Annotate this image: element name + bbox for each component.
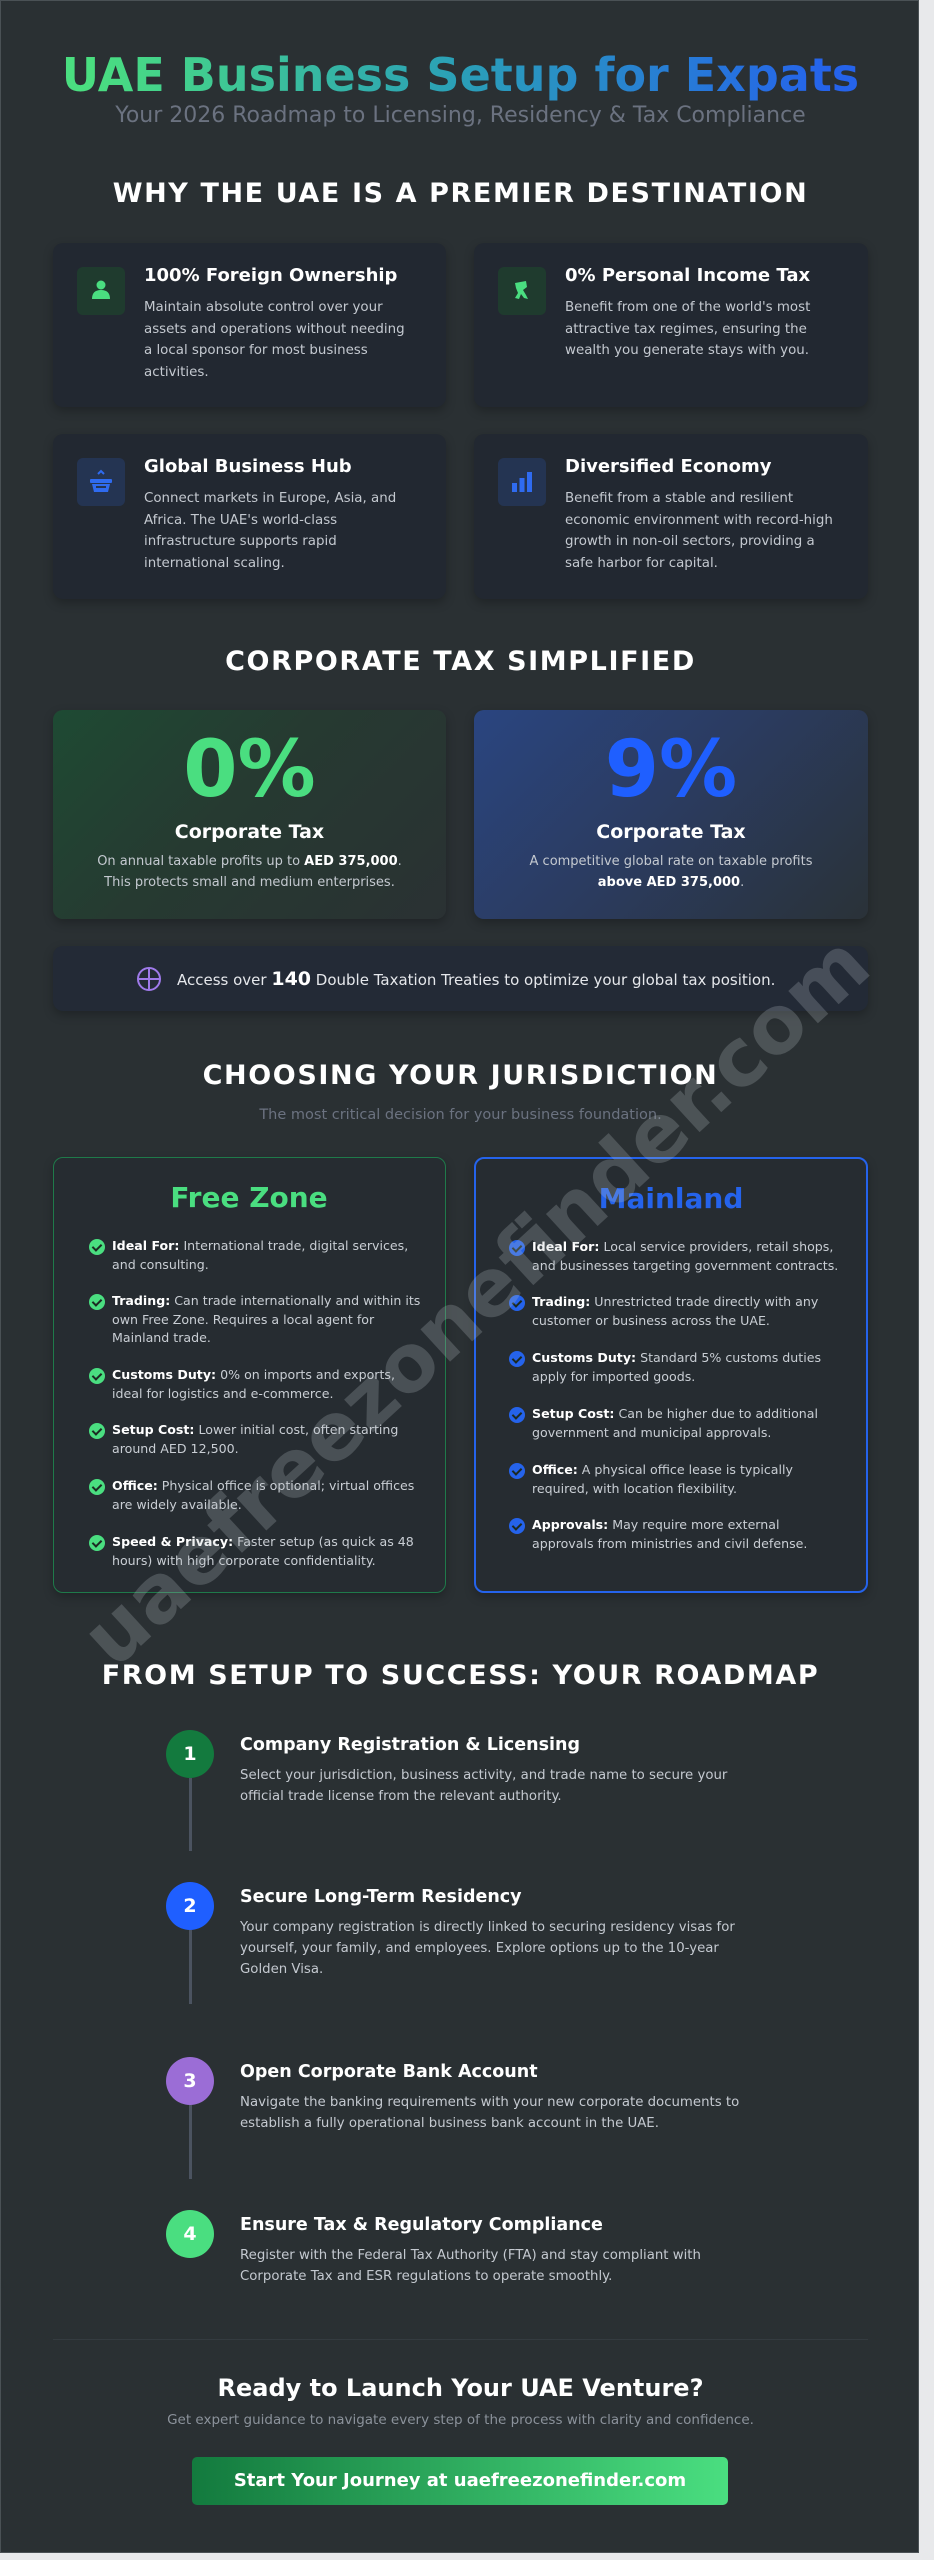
item: ideal for	[89, 1238, 408, 1272]
item: ideal for: and consulting.	[112, 1256, 209, 1272]
card: global hub	[53, 434, 446, 599]
item: setup cost	[509, 1406, 818, 1440]
item: setup cost: Setup Cost: Lower initial cost, often starting	[112, 1422, 398, 1437]
description: This protects small and medium enterprises.	[104, 875, 395, 890]
card: diversified economy	[474, 434, 868, 599]
watermark: uaefreezonefinder.com	[64, 917, 887, 1684]
item: setup cost	[89, 1422, 398, 1456]
heading: jurisdiction: CHOOSING YOUR JURISDICTION	[203, 1060, 718, 1091]
panel title: Free Zone	[170, 1181, 328, 1214]
item: ideal for: Ideal For: Local service providers, retail shops,	[532, 1239, 833, 1254]
icon: bar chart	[498, 458, 546, 506]
panel: 9% tax	[474, 710, 868, 919]
card: income tax	[474, 243, 868, 407]
icon: basket	[77, 458, 125, 506]
item: speed	[89, 1534, 414, 1568]
item: trading	[509, 1294, 818, 1328]
item: customs	[89, 1367, 395, 1400]
item: office	[509, 1462, 793, 1496]
step 4	[166, 2210, 701, 2284]
item: approvals: approvals from ministries and civil defense.	[532, 1536, 807, 1550]
description	[97, 854, 402, 890]
item: setup cost: Setup Cost: Can be higher due to additional	[532, 1406, 818, 1421]
step 4: Register with the Federal Tax Authority (FTA) and stay compliant with Corporate Tax and ESR regulations to operate smoothly.	[240, 2248, 701, 2284]
card title: Global Business Hub	[144, 456, 352, 477]
panel: 0% tax	[53, 710, 446, 919]
subheading: The most critical decision for your business foundation.	[259, 1107, 662, 1123]
step 2	[166, 1882, 735, 2004]
step 3: Navigate the banking requirements with your new corporate documents to establish a fully operational business bank account in the UAE.	[240, 2095, 739, 2131]
CTA heading: Ready to Launch Your UAE Venture?	[217, 2374, 704, 2402]
item: office: Office: A physical office lease is typically	[532, 1462, 793, 1477]
item: speed: Speed & Privacy: Faster setup (as quick as 48	[112, 1534, 414, 1549]
card title: Diversified Economy	[565, 456, 772, 477]
big number 9%: 9%	[605, 725, 737, 815]
description: above AED 375,000.	[598, 875, 744, 890]
step 4: Ensure Tax & Regulatory Compliance	[240, 2215, 603, 2235]
subtitle: Your 2026 Roadmap to Licensing, Residency & Tax Compliance	[115, 103, 806, 128]
step 3: Open Corporate Bank Account	[240, 2062, 538, 2082]
panel title: Mainland	[599, 1182, 743, 1215]
CTA button: Start Your Journey at uaefreezonefinder.com	[234, 2470, 686, 2491]
label: Corporate Tax	[596, 821, 746, 843]
card text: Maintain absolute control over your assets and operations without needing a local sponsor for most business activities.	[144, 300, 405, 380]
description: A competitive global rate on taxable profits	[530, 854, 812, 869]
description: On annual taxable profits up to AED 375,000.	[97, 854, 402, 869]
item: office: are widely available.	[112, 1496, 242, 1512]
item: ideal for: Ideal For: International trade, digital services,	[112, 1238, 408, 1253]
item: trading: own Free Zone. Requires a local agent for	[112, 1312, 374, 1326]
card text: Benefit from one of the world's most attractive tax regimes, ensuring the wealth you generate stays with you.	[565, 300, 810, 358]
step 3: 3	[183, 2070, 197, 2092]
item: trading: Trading: Unrestricted trade directly with any	[532, 1294, 818, 1309]
icon: globe	[137, 967, 161, 991]
item: ideal for	[509, 1239, 838, 1272]
item: approvals: Approvals: May require more external	[532, 1517, 779, 1532]
item: customs: apply for imported goods.	[532, 1368, 695, 1384]
heading: roadmap: FROM SETUP TO SUCCESS: YOUR ROADMAP	[102, 1660, 819, 1691]
card: foreign ownership	[53, 243, 446, 407]
item: ideal for: and businesses targeting government contracts.	[532, 1258, 838, 1272]
card text: Benefit from a stable and resilient economic environment with record-high growth in non-oil sectors, providing a safe harbor for capital.	[565, 491, 833, 570]
item: customs: Customs Duty: Standard 5% customs duties	[532, 1350, 821, 1365]
heading: corporate tax: CORPORATE TAX SIMPLIFIED	[225, 646, 696, 677]
item: speed: hours) with high corporate confidentiality.	[112, 1552, 376, 1568]
icon: money	[498, 267, 546, 315]
step 3	[166, 2057, 739, 2179]
label: Corporate Tax	[175, 821, 324, 843]
step 2: Secure Long-Term Residency	[240, 1887, 522, 1907]
callout: treaties	[53, 946, 868, 1011]
item: office: Office: Physical office is optional; virtual offices	[112, 1478, 414, 1493]
treaty text: Access over 140 Double Taxation Treaties to optimize your global tax position.	[177, 968, 775, 990]
item: trading: customer or business across the UAE.	[532, 1312, 770, 1328]
item: office: required, with location flexibility.	[532, 1480, 737, 1496]
item: trading	[89, 1293, 420, 1345]
step 2: Your company registration is directly linked to securing residency visas for yourself, your family, and employees. Explore options up to the 10-year Golden Visa.	[240, 1920, 735, 1977]
card text: Connect markets in Europe, Asia, and Africa. The UAE's world-class infrastructure supports rapid international scaling.	[144, 491, 396, 570]
card title: 0% Personal Income Tax	[565, 265, 810, 286]
item: customs	[509, 1350, 821, 1384]
card title: 100% Foreign Ownership	[144, 265, 397, 286]
step 1: Company Registration & Licensing	[240, 1735, 580, 1755]
step 2: 2	[183, 1895, 197, 1917]
item: customs: ideal for logistics and e-commerce.	[112, 1386, 333, 1400]
step 1: Select your jurisdiction, business activity, and trade name to secure your official trade license from the relevant authority.	[240, 1768, 727, 1804]
description	[530, 854, 812, 890]
icon: person	[77, 267, 125, 315]
item: approvals	[509, 1517, 807, 1550]
panel: free zone	[53, 1157, 446, 1593]
CTA subtitle: Get expert guidance to navigate every step of the process with clarity and confidence.	[167, 2412, 754, 2428]
item: office	[89, 1478, 414, 1512]
item: setup cost: government and municipal approvals.	[532, 1424, 771, 1440]
item: customs: Customs Duty: 0% on imports and exports,	[112, 1367, 395, 1382]
item: trading: Mainland trade.	[112, 1330, 211, 1345]
step 4: 4	[183, 2223, 197, 2245]
item: setup cost: around AED 12,500.	[112, 1440, 239, 1456]
heading: why the UAE: WHY THE UAE IS A PREMIER DESTINATION	[113, 178, 808, 209]
item: trading: Trading: Can trade internationally and within its	[112, 1293, 420, 1308]
step 1: 1	[183, 1743, 197, 1765]
CTA button	[192, 2457, 728, 2505]
step 1	[166, 1730, 728, 1851]
title: UAE Business Setup for Expats	[62, 48, 859, 102]
big number 0%: 0%	[183, 725, 316, 815]
panel: mainland	[474, 1157, 868, 1593]
